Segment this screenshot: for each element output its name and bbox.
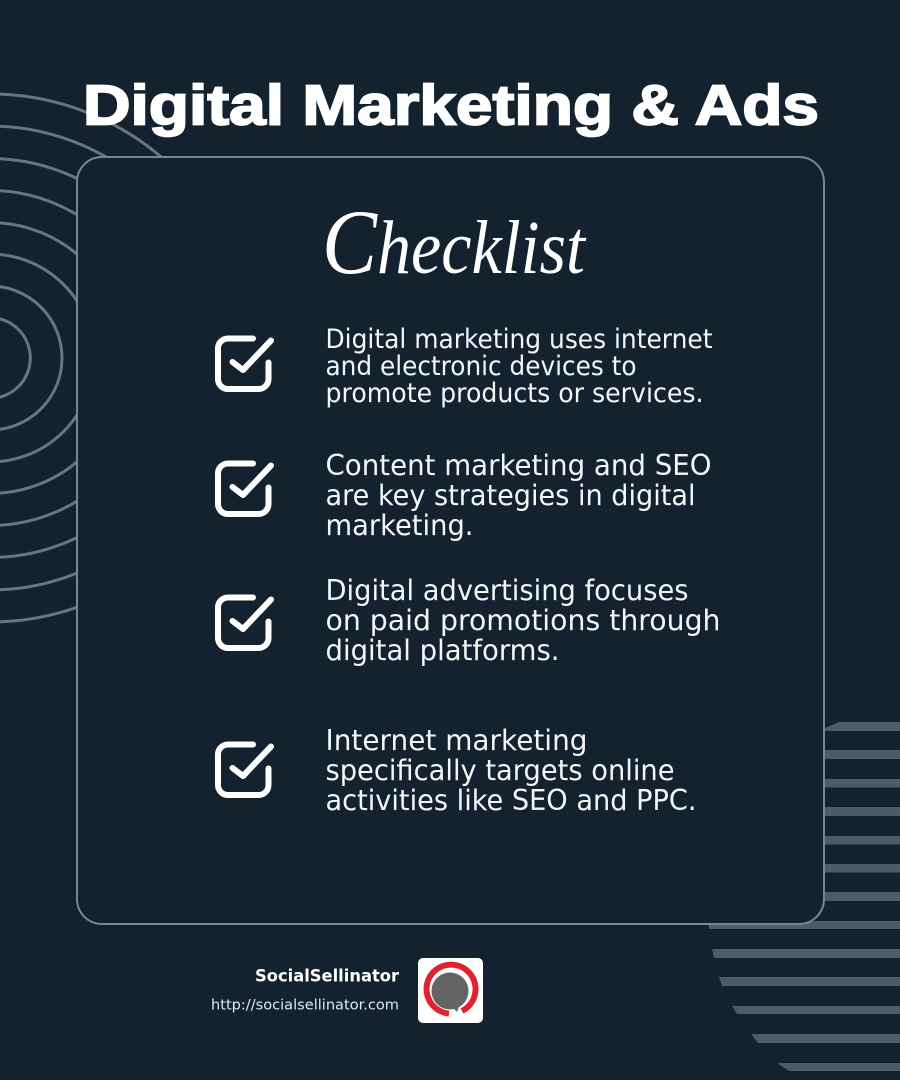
footer brand name: SocialSellinator bbox=[255, 966, 400, 986]
text block 1: and electronic devices to bbox=[326, 351, 636, 382]
checklist item 2 bbox=[218, 449, 712, 542]
text block 1: promote products or services. bbox=[326, 378, 704, 409]
title: Digital Marketing & Ads bbox=[83, 74, 819, 138]
concentric circles decoration bbox=[0, 94, 254, 622]
text block 4: activities like SEO and PPC. bbox=[326, 784, 696, 817]
icon: checkbox 4 bbox=[218, 744, 271, 795]
heading: Checklist: Checklist bbox=[322, 191, 587, 293]
text block 3: on paid promotions through bbox=[326, 604, 720, 637]
text block 1: Digital marketing uses internet bbox=[326, 324, 712, 355]
text block 2: marketing. bbox=[326, 509, 474, 542]
text block 4 bbox=[326, 724, 696, 817]
checklist item 1 bbox=[218, 324, 712, 409]
text block 4: specifically targets online bbox=[326, 754, 674, 787]
panel: checklist card bbox=[77, 157, 824, 924]
icon: checkbox 1 bbox=[218, 338, 271, 389]
footer url: http://socialsellinator.com bbox=[211, 998, 399, 1014]
text block 3: digital platforms. bbox=[326, 634, 560, 667]
checklist item 4 bbox=[218, 724, 696, 817]
text block 1 bbox=[326, 324, 712, 409]
icon: checkbox 3 bbox=[218, 598, 271, 648]
checklist item 3 bbox=[218, 574, 720, 667]
text block 2: are key strategies in digital bbox=[326, 479, 696, 512]
text block 2: Content marketing and SEO bbox=[326, 449, 712, 482]
icon: logo bbox=[418, 958, 483, 1023]
text block 3 bbox=[326, 574, 720, 667]
text block 2 bbox=[326, 449, 712, 542]
striped circle decoration bbox=[708, 722, 900, 1071]
icon: checkbox 2 bbox=[218, 464, 271, 514]
text block 3: Digital advertising focuses bbox=[326, 574, 688, 607]
text block 4: Internet marketing bbox=[326, 724, 588, 757]
